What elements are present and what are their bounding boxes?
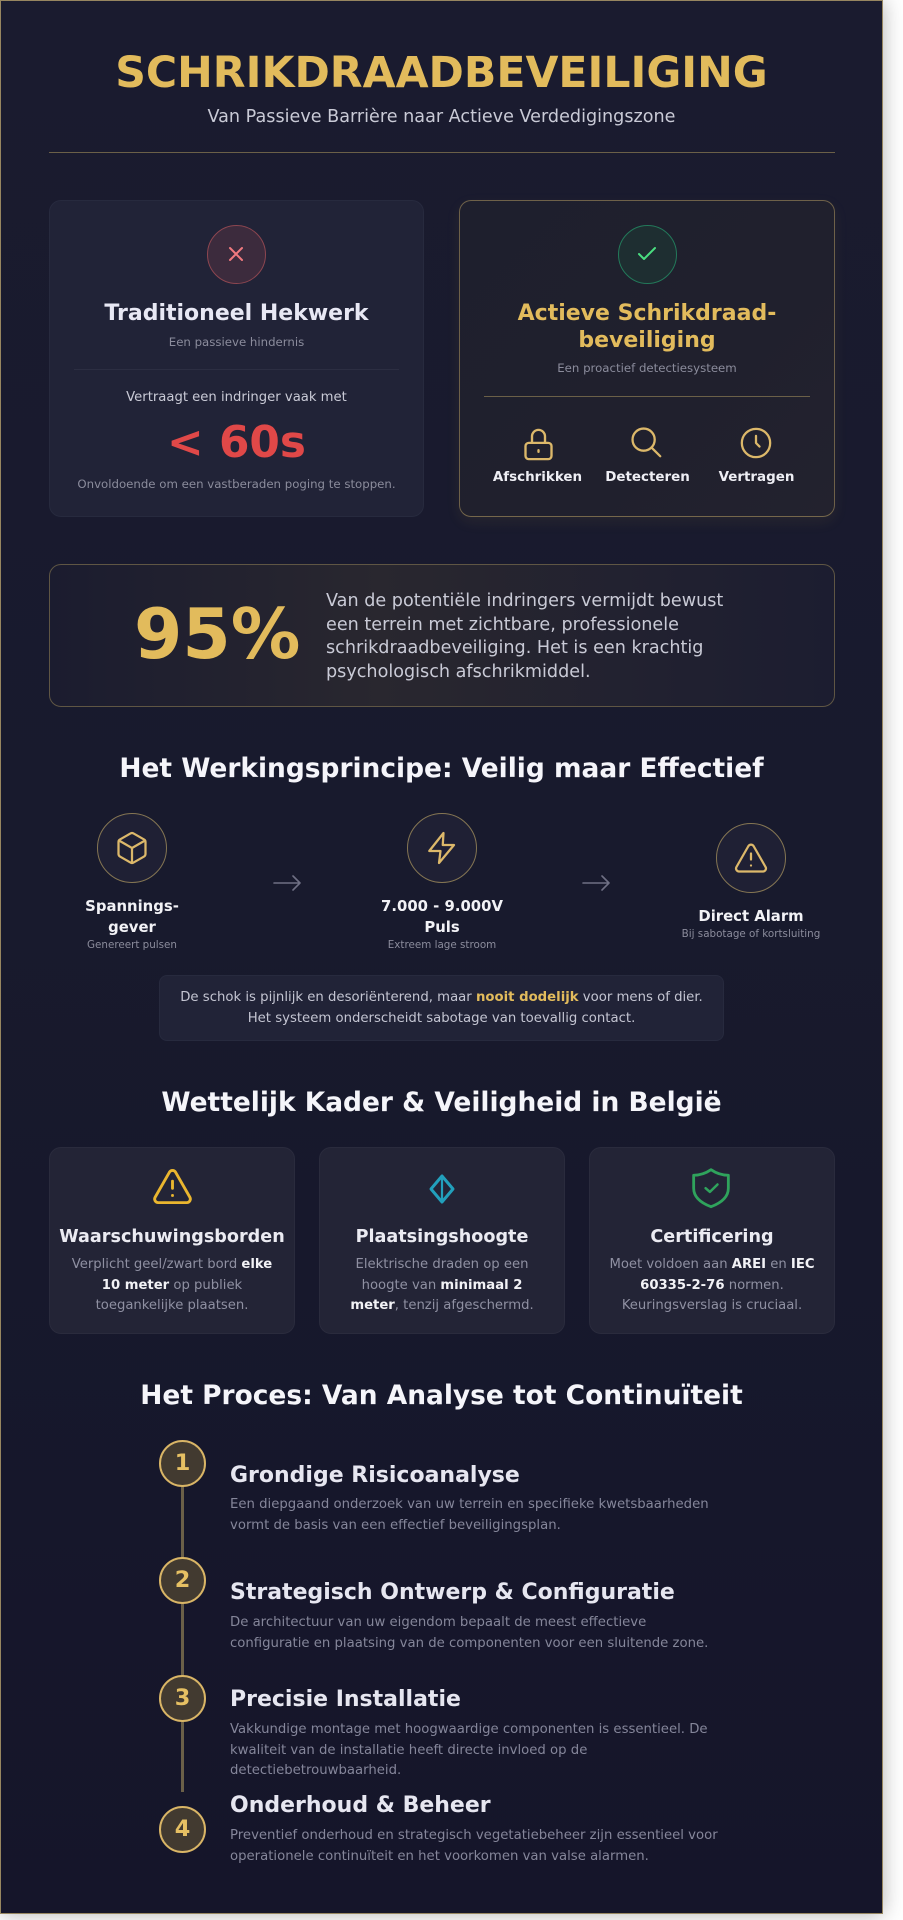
heading: traditioneel hekwerk: Traditioneel Hekwerk: [104, 301, 369, 326]
icon: green check: [618, 225, 677, 284]
feature: afschrikken: [493, 428, 582, 485]
text: 10 meter op publiek: [102, 1278, 242, 1293]
note: Onvoldoende om een vastberaden poging te stoppen.: [77, 477, 396, 491]
step: direct alarm: [682, 823, 820, 940]
step 4 number: 4: [175, 1816, 190, 1842]
heading: actieve schrikdraadbeveiliging: Actieve Schrikdraad-: [518, 301, 776, 326]
step 2 title: Strategisch Ontwerp & Configuratie: [230, 1580, 675, 1605]
icon: box: [97, 813, 167, 883]
heading: actieve schrikdraadbeveiliging: [518, 301, 776, 353]
icon: red cross: [207, 225, 266, 284]
icon: bolt: [407, 813, 477, 883]
arrow: [273, 875, 301, 891]
feature: detecteren: Detecteren: [605, 470, 690, 485]
step 4 title: Onderhoud & Beheer: [230, 1793, 491, 1818]
feature: afschrikken: Afschrikken: [493, 470, 582, 485]
panel: certificering: [589, 1147, 835, 1334]
callout: Het systeem onderscheidt sabotage van toevallig contact.: [248, 1011, 635, 1026]
arrow: [582, 875, 610, 891]
text: [350, 1257, 534, 1313]
step 3 text: detectiebetrouwbaarheid.: [230, 1763, 401, 1778]
text: hoogte van minimaal 2: [362, 1278, 522, 1293]
heading: Plaatsingshoogte: [356, 1227, 528, 1247]
heading: actieve schrikdraadbeveiliging: beveiliging: [578, 328, 716, 353]
step 1 text: vormt de basis van een effectief beveiligingsplan.: [230, 1518, 561, 1533]
heading: Waarschuwingsborden: [59, 1227, 285, 1247]
step 3 number: 3: [175, 1685, 190, 1711]
title: SCHRIKDRAADBEVEILIGING: [115, 48, 768, 98]
heading: Certificering: [650, 1227, 774, 1247]
heading: het proces: Het Proces: Van Analyse tot Continuïteit: [140, 1380, 743, 1411]
text: Moet voldoen aan AREI en IEC: [609, 1257, 814, 1272]
step 4 number: [159, 1806, 206, 1853]
step 2 number: 2: [175, 1567, 190, 1593]
subtitle: Van Passieve Barrière naar Actieve Verdedigingszone: [207, 107, 676, 127]
heading: werkingsprincipe: Het Werkingsprincipe: Veilig maar Effectief: [119, 753, 764, 784]
panel: waarschuwingsborden: [49, 1147, 295, 1334]
icon: shield check: [692, 1168, 730, 1208]
text: Verplicht geel/zwart bord elke: [72, 1257, 272, 1272]
text: Elektrische draden op een: [356, 1257, 528, 1272]
panel: traditioneel hekwerk: [49, 200, 424, 517]
icon: warning: [716, 823, 786, 893]
text: deterrence: [326, 591, 723, 682]
text: deterrence: psychologisch afschrikmiddel.: [326, 662, 591, 682]
text: toegankelijke plaatsen.: [96, 1298, 248, 1313]
step 3 text: kwaliteit van de installatie heeft directe invloed op de: [230, 1743, 587, 1758]
feature: vertragen: Vertragen: [719, 470, 794, 485]
panel: actieve schrikdraadbeveiliging: [459, 200, 835, 517]
label: 7.000 - 9.000V: [381, 897, 503, 915]
text: vertraagt: Vertraagt een indringer vaak met: [126, 390, 347, 405]
callout: De schok is pijnlijk en desoriënterend, maar nooit dodelijk voor mens of dier.: [180, 990, 703, 1005]
text: 60335-2-76 normen.: [640, 1278, 784, 1293]
step 3 text: [230, 1722, 708, 1778]
step 1 number: [159, 1440, 206, 1487]
step 1 text: Een diepgaand onderzoek van uw terrein en specifieke kwetsbaarheden: [230, 1497, 709, 1512]
text: Keuringsverslag is cruciaal.: [622, 1298, 802, 1313]
step 3 text: Vakkundige montage met hoogwaardige componenten is essentieel. De: [230, 1722, 708, 1737]
step 1 number: 1: [175, 1450, 190, 1476]
text: [72, 1257, 272, 1313]
label: Puls: [424, 918, 460, 936]
text: meter, tenzij afgeschermd.: [350, 1298, 534, 1313]
icon: warning sign: [153, 1169, 192, 1204]
subtext: Een proactief detectiesysteem: [557, 361, 737, 375]
step 1 title: Grondige Risicoanalyse: [230, 1463, 520, 1488]
heading: wettelijk kader: Wettelijk Kader & Veiligheid in België: [161, 1087, 722, 1118]
text: [609, 1257, 814, 1313]
step 4 text: Preventief onderhoud en strategisch vegetatiebeheer zijn essentieel voor: [230, 1828, 718, 1843]
sublabel: Genereert pulsen: [87, 939, 177, 951]
text: deterrence: Van de potentiële indringers vermijdt bewust: [326, 591, 723, 611]
text: deterrence: een terrein met zichtbare, professionele: [326, 615, 679, 635]
step 1 text: [230, 1497, 709, 1533]
label: Direct Alarm: [698, 907, 804, 925]
feature: vertragen: [718, 428, 794, 485]
step 2 number: [159, 1557, 206, 1604]
label: gever: [108, 918, 156, 936]
stat: under 60 seconds: < 60s: [167, 417, 306, 468]
text: deterrence: schrikdraadbeveiliging. Het is een krachtig: [326, 638, 703, 658]
label: Spannings-: [85, 897, 179, 915]
step 2 text: [230, 1615, 708, 1651]
subtext: Een passieve hindernis: [169, 335, 304, 349]
stat: 95%: 95%: [134, 594, 300, 675]
step 4 text: operationele continuïteit en het voorkomen van valse alarmen.: [230, 1849, 649, 1864]
panel: plaatsingshoogte: [319, 1147, 565, 1334]
sublabel: Bij sabotage of kortsluiting: [682, 928, 820, 940]
label: [381, 897, 503, 936]
step 3 number: [159, 1675, 206, 1722]
step 4 text: [230, 1828, 718, 1864]
step: puls: [381, 813, 503, 951]
step: spanningsgever: [85, 813, 179, 951]
timeline: [159, 1440, 718, 1864]
step 3 title: Precisie Installatie: [230, 1687, 461, 1712]
step 2 text: De architectuur van uw eigendom bepaalt de meest effectieve: [230, 1615, 646, 1630]
callout: [159, 975, 724, 1041]
step 2 text: configuratie en plaatsing van de componenten voor een sluitende zone.: [230, 1636, 708, 1651]
label: [85, 897, 179, 936]
feature: detecteren: [605, 427, 690, 485]
panel: 95 percent statistic: [49, 564, 835, 707]
sublabel: Extreem lage stroom: [388, 939, 496, 951]
icon: height marker: [430, 1174, 454, 1204]
